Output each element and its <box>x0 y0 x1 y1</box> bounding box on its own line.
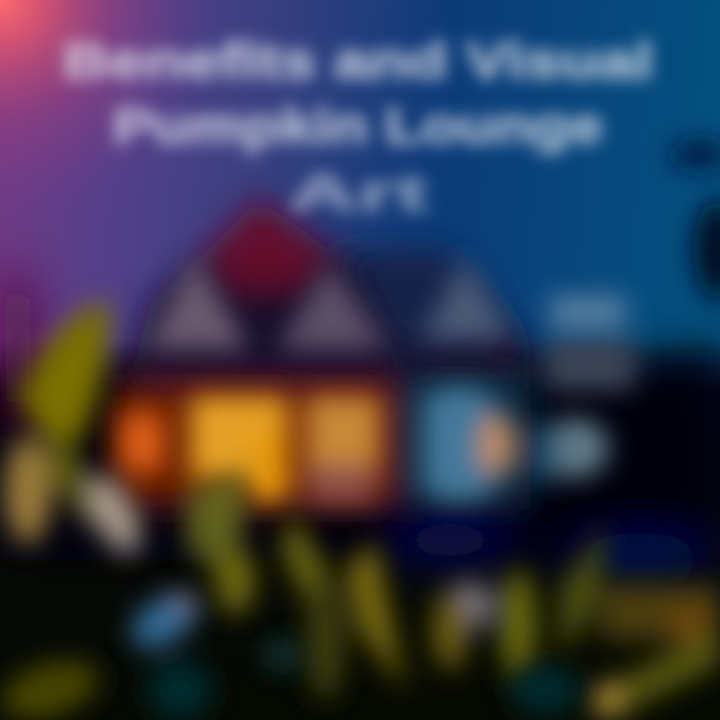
title <box>63 33 653 221</box>
dark ground and garden base <box>0 250 720 720</box>
blue foreground flowers <box>121 580 581 720</box>
roof gables <box>145 255 635 390</box>
title: Pumpkin Lounge <box>113 98 603 154</box>
title: Art <box>288 165 429 221</box>
house silhouette <box>112 198 530 510</box>
blue side windows <box>424 388 609 500</box>
foreground leaves <box>0 298 720 720</box>
glowing windows <box>120 396 380 503</box>
title: Benefits and Visual <box>63 33 653 89</box>
dark tree on right <box>670 142 720 300</box>
